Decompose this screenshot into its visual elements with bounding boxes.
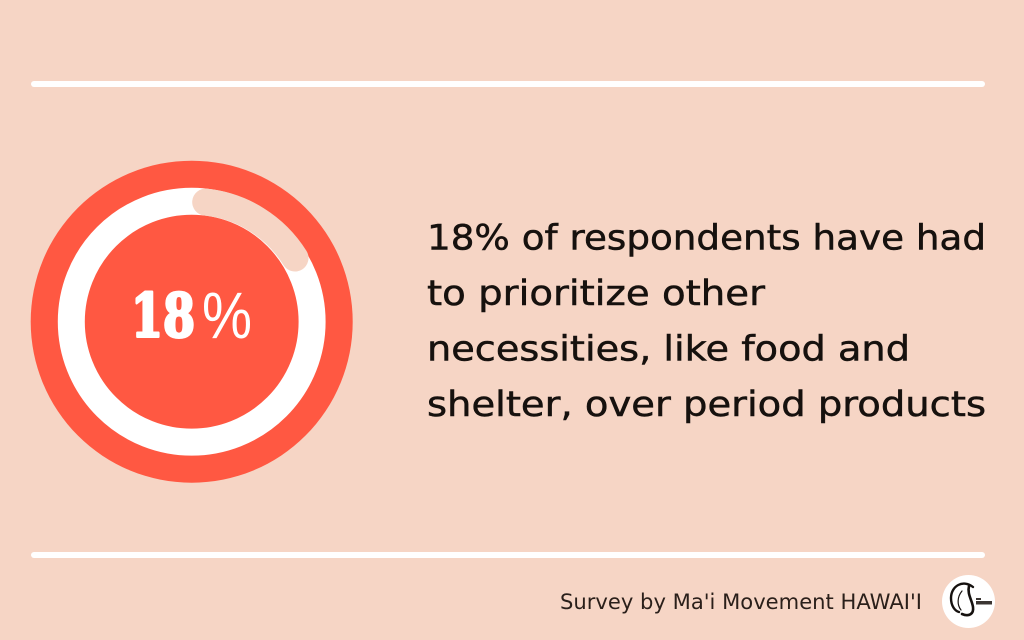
white ring track <box>71 201 312 442</box>
top divider <box>31 81 985 87</box>
outer red disc <box>31 161 353 483</box>
highlighted 18% arc <box>206 202 295 258</box>
main statement text: to prioritize other <box>427 274 766 314</box>
main statement text <box>427 218 986 425</box>
percentage label: % <box>202 278 252 352</box>
bottom divider <box>31 552 985 558</box>
logo badge <box>942 575 995 628</box>
logo wordmark <box>976 598 992 604</box>
survey credit: Survey by Ma'i Movement HAWAI'I <box>560 590 922 615</box>
donut chart: 18% <box>31 161 353 483</box>
percentage label: 18 <box>131 282 195 352</box>
main statement text: 18% of respondents have had <box>427 218 986 258</box>
main statement text: shelter, over period products <box>427 385 986 425</box>
logo background <box>942 575 995 628</box>
main statement text: necessities, like food and <box>427 330 910 370</box>
percentage label <box>131 278 252 352</box>
logo hair silhouette <box>951 584 973 615</box>
